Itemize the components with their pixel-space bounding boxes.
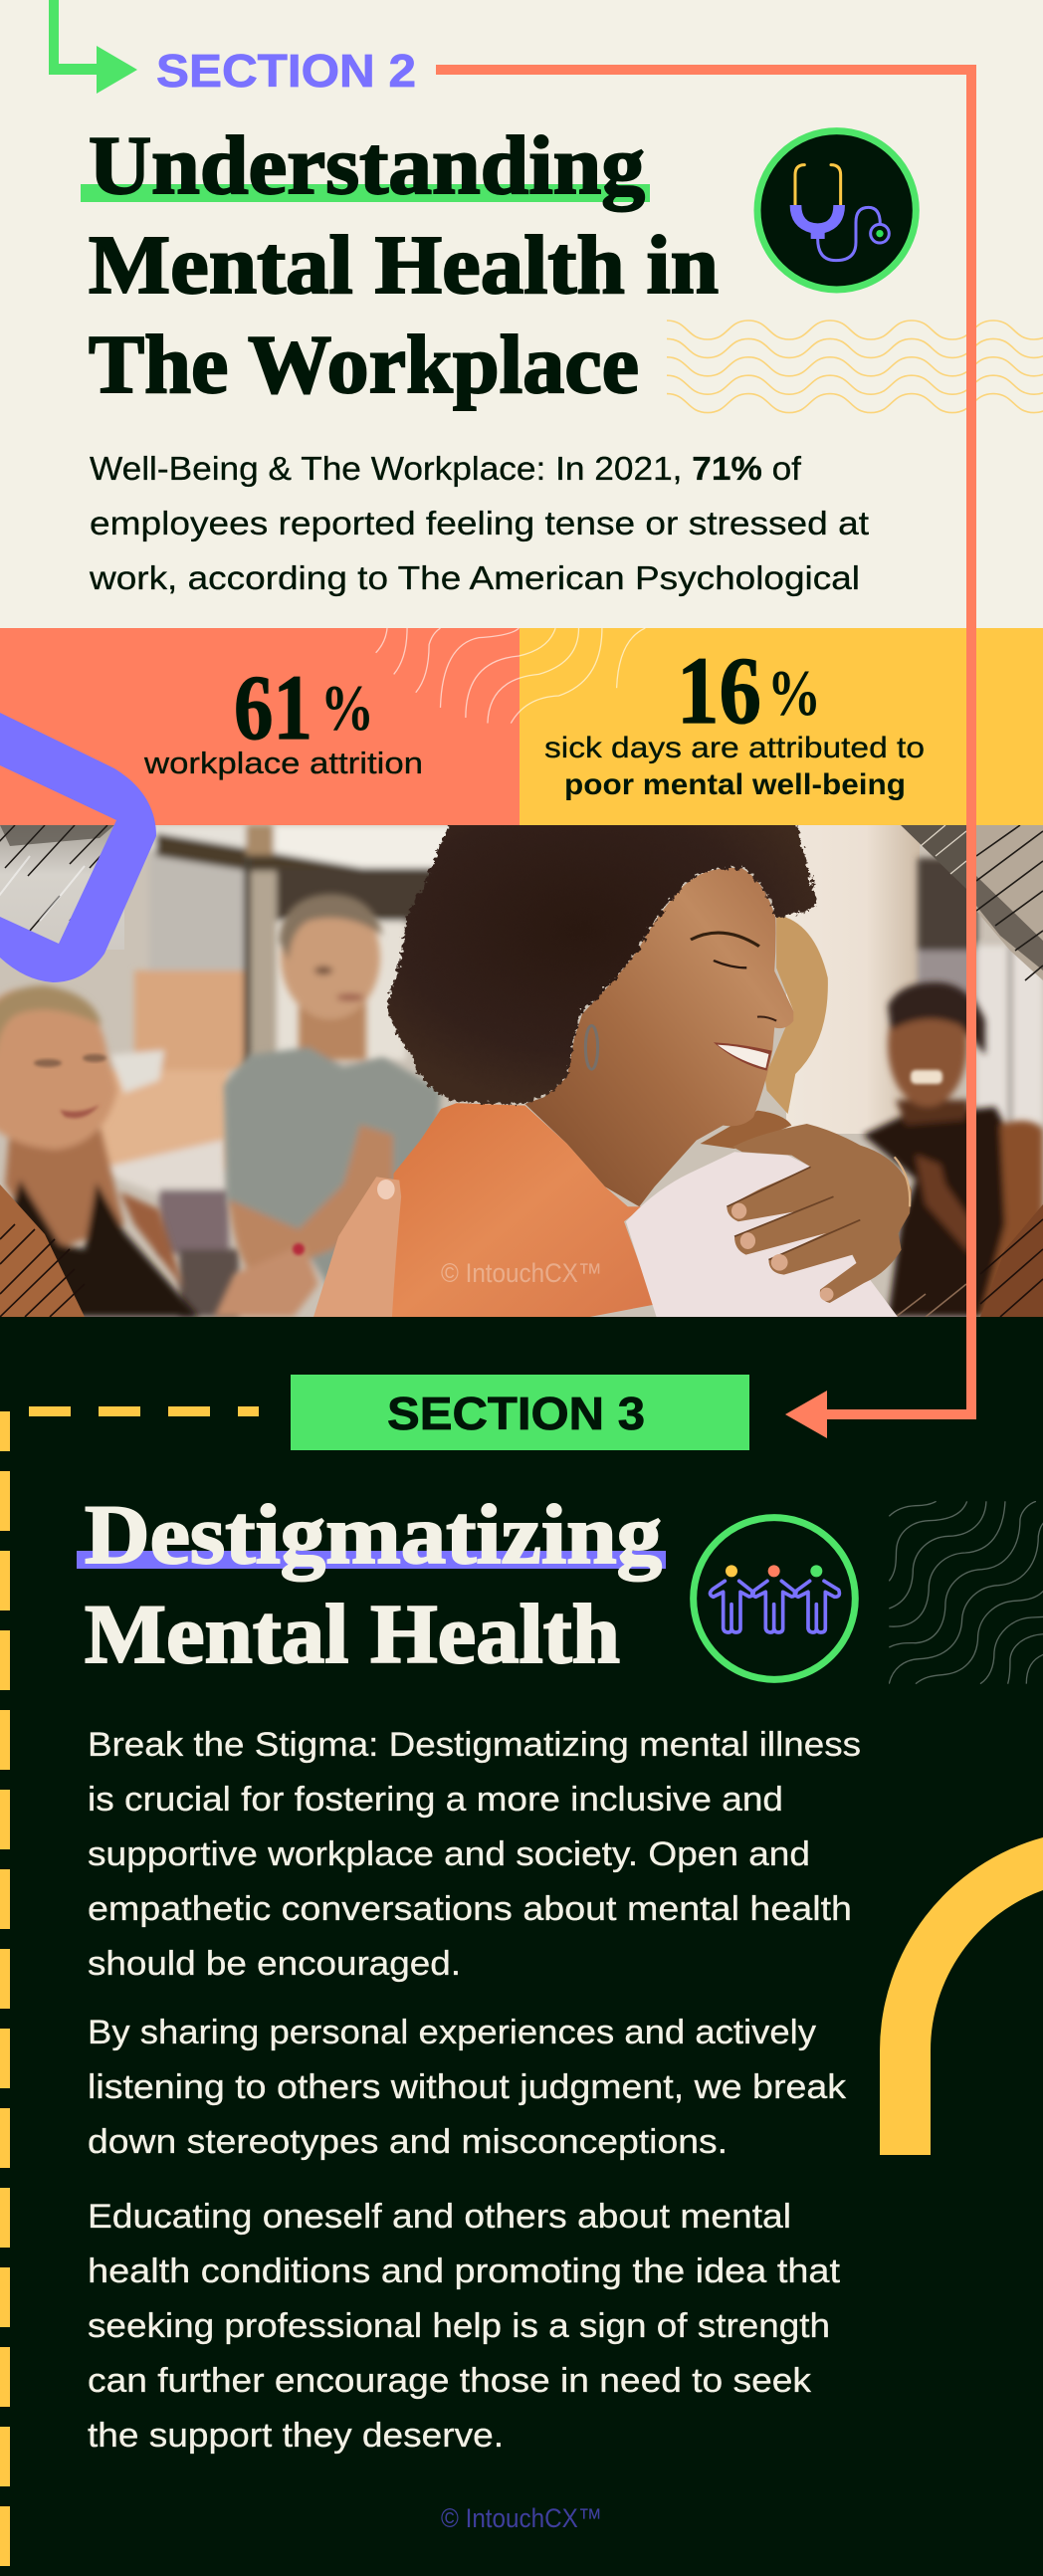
hand on shoulder [312, 1177, 401, 1323]
icon: three people holding hands [694, 1518, 855, 1679]
body text: sharing personal experiences: By sharing personal experiences and actively [88, 2014, 816, 2051]
body text: educating oneself: the support they deserve. [88, 2417, 504, 2455]
orange t-shirt [392, 1103, 655, 1317]
intro paragraph: employees reported feeling tense or stressed at [90, 505, 869, 541]
title: Destigmatizing Mental Health: Mental Health [85, 1588, 620, 1681]
decorative squiggles on stat band [376, 628, 645, 724]
main woman's arm and hand [727, 1124, 912, 1303]
panel: 16% stat background [520, 628, 1043, 825]
man in grey shirt [214, 894, 441, 1317]
stat: 16% sick days: sick days are attributed to [544, 732, 925, 764]
arrow: green connector into section 2 [49, 0, 137, 94]
section 2 label: SECTION 2 [156, 45, 416, 97]
stat: 16% sick days [544, 637, 925, 801]
body text: break the stigma [88, 1726, 861, 1983]
panel: 61% stat background [0, 628, 520, 825]
decorative yellow arch [880, 1837, 1043, 2155]
stat: 61% workplace attrition: workplace attrition [143, 746, 423, 780]
hatched top-right corner [901, 825, 1043, 980]
blond hair of hugged person [765, 915, 828, 1114]
footer copyright: © IntouchCX™ [441, 2503, 602, 2533]
left hatched corner [0, 825, 124, 950]
title: Understanding Mental Health in The Workplace: Mental Health in [89, 219, 719, 312]
woman on the right [863, 982, 1043, 1317]
body text: break the stigma: supportive workplace and society. Open and [88, 1835, 810, 1873]
title: Understanding Mental Health in The Workplace: The Workplace [89, 319, 639, 411]
decorative grey waves [889, 1501, 1043, 1684]
woman on the left [0, 985, 199, 1317]
neck and face [525, 868, 793, 1206]
photo watermark: © IntouchCX™ [441, 1258, 602, 1288]
stat: 16% sick days: 16 [677, 637, 761, 744]
title: Destigmatizing Mental Health: Destigmatizing [85, 1488, 662, 1582]
body text: sharing personal experiences: down stereotypes and misconceptions. [88, 2123, 728, 2161]
title: Understanding Mental Health in The Workplace: Understanding [89, 119, 645, 212]
icon: stethoscope badge [757, 131, 916, 290]
white ribbed shirt [626, 1152, 902, 1323]
body text: educating oneself: can further encourage those in need to seek [88, 2362, 812, 2400]
stat: 16% sick days: % [767, 657, 821, 730]
section 3 label [291, 1375, 749, 1450]
bottom-right hatched corner [980, 1204, 1043, 1317]
hugging women [312, 815, 912, 1323]
main woman's afro hair [388, 815, 816, 1104]
body text: educating oneself [88, 2198, 841, 2455]
yellow dashed connector [0, 1406, 259, 2566]
body text: break the stigma: should be encouraged. [88, 1945, 461, 1983]
body text: break the stigma: Break the Stigma: Destigmatizing mental illness [88, 1726, 861, 1764]
decorative yellow waves [667, 321, 1043, 413]
intro paragraph: Well-Being & The Workplace: In 2021, 71% of [90, 450, 802, 487]
stat: 61% workplace attrition: 61 [234, 657, 313, 759]
intro paragraph [89, 450, 869, 596]
bottom-left hatched corner [0, 1184, 85, 1317]
pillar and right background [786, 825, 920, 1134]
stat: 61% workplace attrition [143, 657, 423, 780]
face details [585, 933, 776, 1071]
arrow: coral connector from section 2 to section 3 [436, 65, 976, 1438]
stat: 16% sick days: poor mental well-being [564, 768, 906, 801]
body text: educating oneself: Educating oneself and others about mental [88, 2198, 791, 2236]
photo: colleagues hugging and smiling [0, 815, 1043, 1323]
body text: break the stigma: is crucial for fostering a more inclusive and [88, 1781, 783, 1819]
title highlight bar [81, 184, 650, 202]
top section background [0, 0, 1043, 628]
body text: educating oneself: seeking professional help is a sign of strength [88, 2307, 830, 2345]
section 3 label: SECTION 3 [387, 1388, 645, 1439]
title highlight bar [77, 1551, 666, 1569]
body text: sharing personal experiences: listening to others without judgment, we break [88, 2068, 847, 2106]
title: Understanding Mental Health in The Workplace [81, 119, 719, 411]
title: Destigmatizing Mental Health [77, 1488, 666, 1681]
body text: sharing personal experiences [88, 2014, 847, 2161]
body text: educating oneself: health conditions and promoting the idea that [88, 2253, 841, 2290]
body text: break the stigma: empathetic conversations about mental health [88, 1890, 852, 1928]
stat: 61% workplace attrition: % [320, 672, 374, 745]
intro paragraph: work, according to The American Psychological [89, 559, 860, 596]
bottom section background [0, 1317, 1043, 2576]
decorative purple rounded shape [0, 713, 156, 982]
back arm [701, 1111, 791, 1149]
